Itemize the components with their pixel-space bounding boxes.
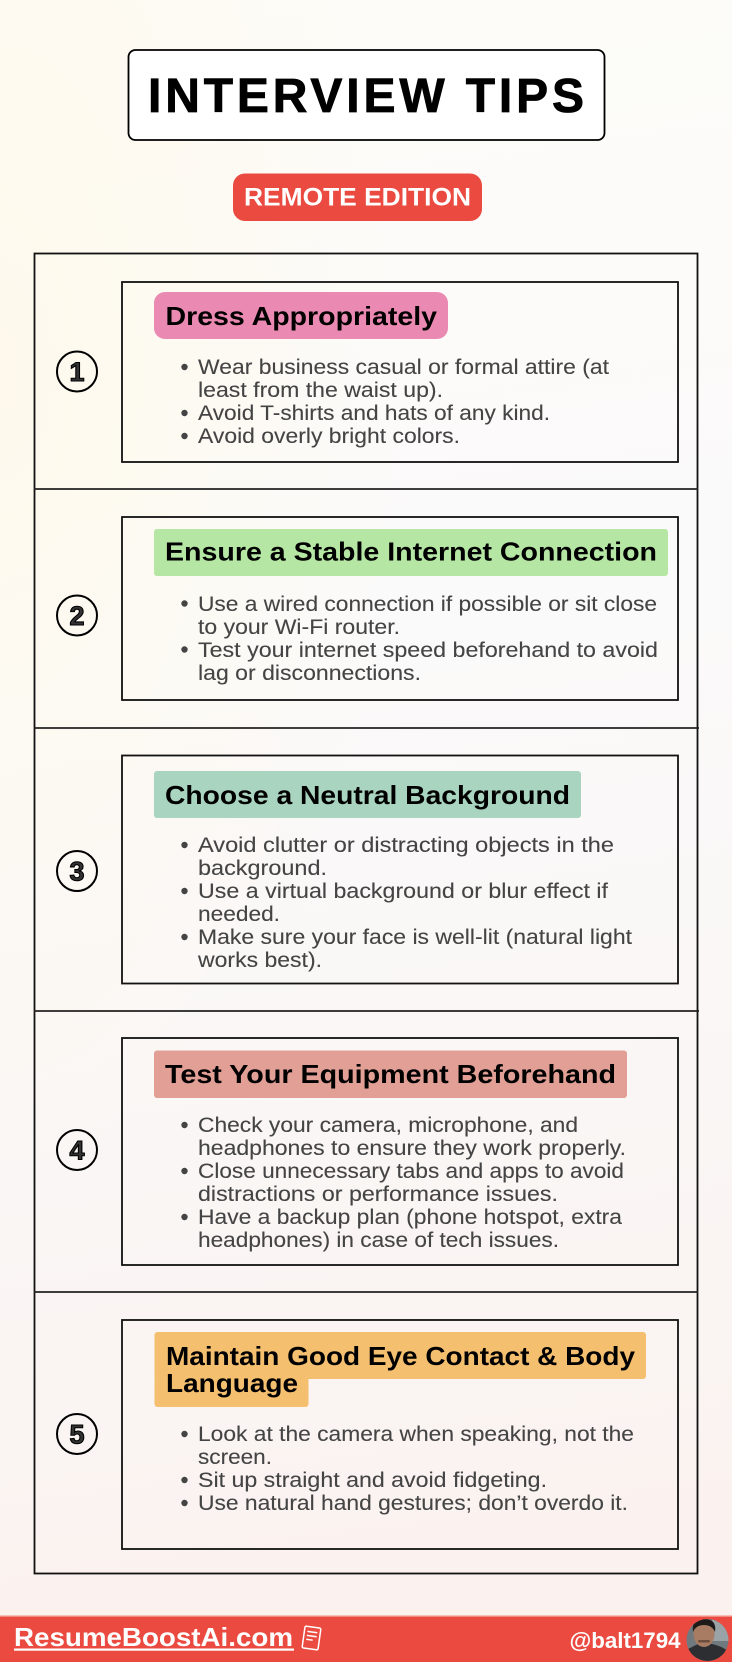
- bullets 3: [181, 834, 632, 972]
- table frame: [34, 254, 699, 1574]
- bullets 4: Have a backup plan (phone hotspot, extra: [198, 1206, 622, 1229]
- bullets 1: [181, 356, 609, 448]
- panel: tip 3: [57, 756, 678, 984]
- bullets 4: distractions or performance issues.: [198, 1183, 558, 1206]
- number badge 3: 3: [69, 856, 85, 886]
- bullets 5: Use natural hand gestures; don’t overdo it.: [198, 1492, 628, 1515]
- box 2: [122, 517, 678, 700]
- footer: [0, 1616, 732, 1662]
- heading: test equipment: Test Your Equipment Beforehand: [165, 1059, 616, 1089]
- panel: tip 2: [57, 517, 678, 700]
- panel: tip 5: [57, 1320, 678, 1549]
- number badge 5: 5: [69, 1420, 85, 1450]
- bullets 5: [181, 1423, 634, 1515]
- box 3: [122, 756, 678, 984]
- number badge 4: [57, 1130, 97, 1170]
- heading: test equipment: [154, 1050, 627, 1098]
- number badge 2: [57, 596, 97, 636]
- bullets 4: [181, 1114, 626, 1252]
- subtitle badge: REMOTE EDITION: [244, 184, 471, 212]
- bullets 4: headphones to ensure they work properly.: [198, 1137, 626, 1160]
- bullets 3: Use a virtual background or blur effect if: [198, 880, 608, 903]
- bullets 2: Use a wired connection if possible or sit close: [198, 593, 657, 616]
- bullets 1: least from the waist up).: [198, 379, 443, 402]
- bullets 2: Test your internet speed beforehand to avoid: [198, 639, 658, 662]
- bullets 2: [181, 593, 658, 685]
- title: INTERVIEW TIPS: [148, 70, 584, 123]
- bullets 3: Avoid clutter or distracting objects in the: [198, 834, 614, 857]
- bullets 2: lag or disconnections.: [198, 662, 421, 685]
- bullets 1: Avoid T-shirts and hats of any kind.: [198, 402, 550, 425]
- heading: eye contact and body language: Maintain Good Eye Contact & Body: [166, 1341, 636, 1371]
- bullets 3: needed.: [198, 903, 280, 926]
- title: [128, 50, 604, 140]
- heading: neutral background: Choose a Neutral Background: [165, 780, 570, 810]
- number badge 1: 1: [69, 357, 85, 387]
- heading: neutral background: [154, 771, 581, 818]
- bullets 3: works best).: [197, 949, 322, 972]
- number badge 4: 4: [69, 1136, 85, 1166]
- bullets 4: Check your camera, microphone, and: [198, 1114, 578, 1137]
- avatar photo: [686, 1619, 729, 1662]
- bullets 3: Make sure your face is well-lit (natural light: [198, 926, 632, 949]
- heading: stable internet: [154, 529, 668, 576]
- panel: tip 4: [57, 1038, 678, 1265]
- box 4: [122, 1038, 678, 1265]
- website link: ResumeBoostAi.com: [14, 1622, 293, 1652]
- subtitle badge: [233, 174, 482, 221]
- bullets 1: Wear business casual or formal attire (at: [198, 356, 609, 379]
- bullets 2: to your Wi-Fi router.: [198, 616, 400, 639]
- bullets 5: screen.: [198, 1446, 272, 1469]
- heading: dress appropriately: Dress Appropriately: [166, 301, 438, 331]
- bullets 4: headphones) in case of tech issues.: [198, 1229, 559, 1252]
- heading: stable internet: Ensure a Stable Internet Connection: [165, 536, 657, 566]
- box 1: [122, 282, 678, 462]
- icon: document: [302, 1626, 321, 1650]
- bullets 3: background.: [198, 857, 327, 880]
- number badge 3: [57, 851, 97, 891]
- heading: dress appropriately: [154, 292, 448, 339]
- heading: eye contact and body language: Language: [166, 1368, 298, 1398]
- heading: eye contact and body language: [154, 1332, 646, 1407]
- bullets 1: Avoid overly bright colors.: [198, 425, 460, 448]
- number badge 2: 2: [69, 601, 85, 631]
- bullets 5: Look at the camera when speaking, not the: [198, 1423, 634, 1446]
- bullets 5: Sit up straight and avoid fidgeting.: [198, 1469, 547, 1492]
- number badge 1: [57, 352, 97, 392]
- panel: tip 1: [57, 282, 678, 462]
- handle: @balt1794: [570, 1628, 681, 1653]
- box 5: [122, 1320, 678, 1549]
- number badge 5: [57, 1414, 97, 1454]
- bullets 4: Close unnecessary tabs and apps to avoid: [198, 1160, 624, 1183]
